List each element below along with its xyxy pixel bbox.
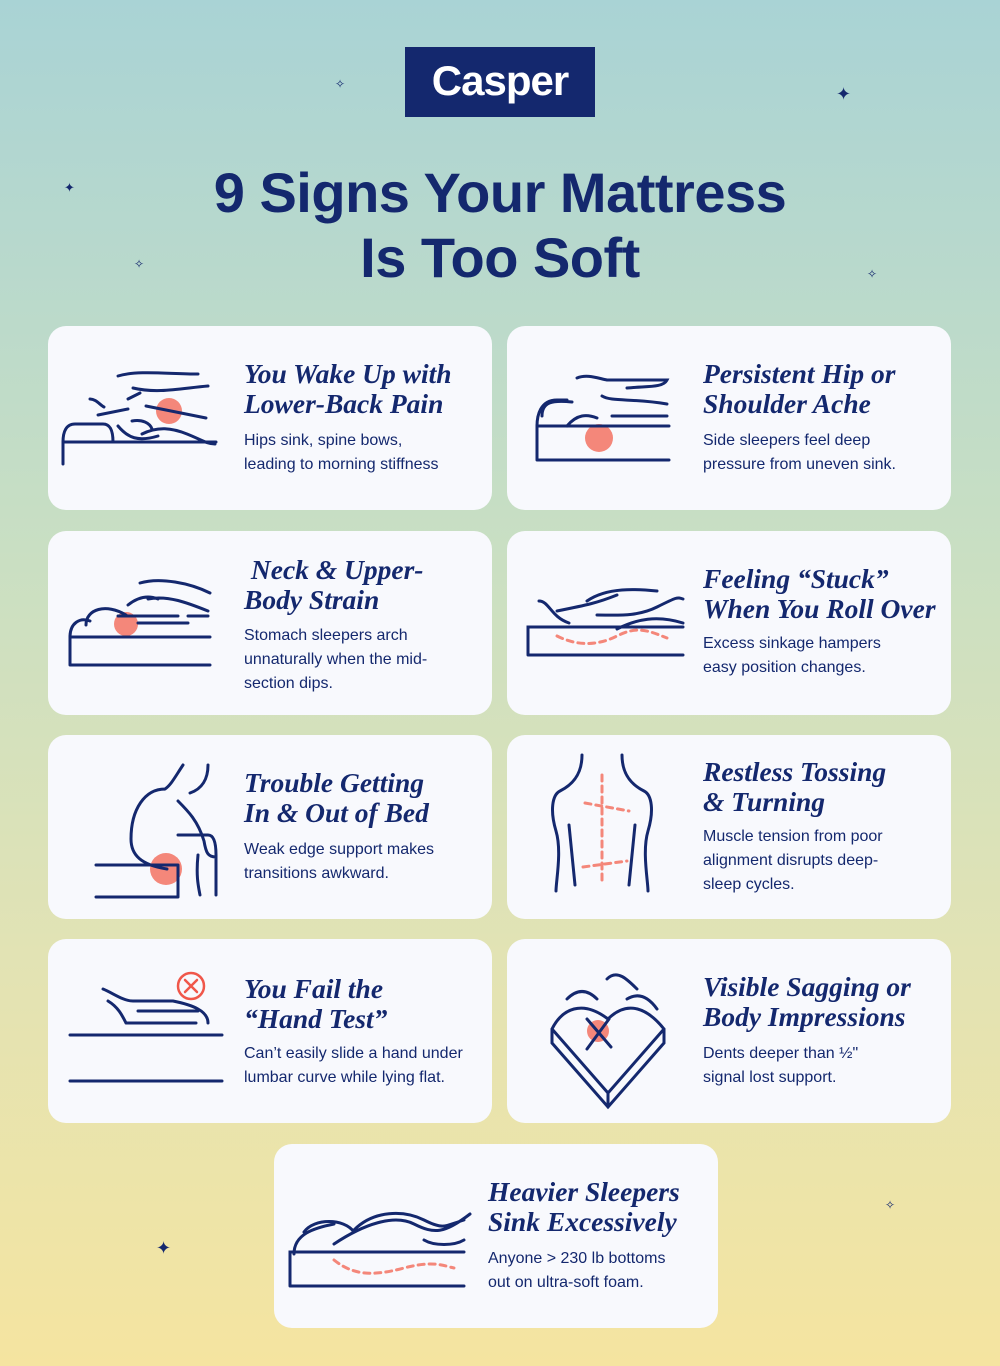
card 3: neck strain — [48, 531, 492, 715]
heading — [702, 971, 911, 1032]
body text: out on ultra-soft foam. — [488, 1274, 644, 1291]
logo: Casper — [432, 57, 568, 104]
icon: hand under back — [68, 972, 224, 1082]
body text — [244, 1045, 463, 1086]
icon: sagging mattress — [550, 973, 666, 1110]
heading: In & Out of Bed — [244, 797, 429, 828]
heading: Trouble Getting — [244, 767, 424, 798]
heading: Feeling “Stuck” — [703, 563, 889, 594]
body text — [703, 635, 881, 676]
body text: Hips sink, spine bows, — [244, 432, 402, 449]
body text: signal lost support. — [703, 1069, 836, 1086]
heading: Sink Excessively — [488, 1206, 677, 1237]
title — [214, 161, 786, 289]
title: Is Too Soft — [360, 226, 640, 289]
card 5: trouble getting out of bed — [48, 735, 492, 919]
body text — [244, 627, 427, 692]
body text: Dents deeper than ½" — [703, 1045, 858, 1062]
heading: Heavier Sleepers — [488, 1176, 680, 1207]
body text: Can’t easily slide a hand under — [244, 1045, 463, 1062]
card 2: hip shoulder ache — [507, 326, 951, 510]
body text: Muscle tension from poor — [703, 828, 883, 845]
heading: Shoulder Ache — [703, 388, 871, 419]
heading — [488, 1176, 680, 1237]
card 7: hand test — [48, 939, 492, 1123]
heading — [703, 358, 896, 419]
heading: Restless Tossing — [703, 756, 886, 787]
heading — [703, 756, 886, 817]
body text: Stomach sleepers arch — [244, 627, 408, 644]
heading: “Hand Test” — [244, 1003, 387, 1034]
heading — [244, 358, 452, 419]
body text: Excess sinkage hampers — [703, 635, 881, 652]
decorative stars — [64, 77, 940, 1258]
heading: Body Strain — [244, 584, 379, 615]
body text: Anyone > 230 lb bottoms — [488, 1250, 665, 1267]
body text — [703, 828, 883, 893]
heading — [244, 767, 430, 828]
icon: back with spine — [551, 754, 653, 892]
heading: Body Impressions — [703, 1001, 905, 1032]
body text: lumbar curve while lying flat. — [244, 1069, 445, 1086]
heading — [703, 563, 936, 624]
heading: & Turning — [703, 786, 825, 817]
title: 9 Signs Your Mattress — [214, 161, 786, 224]
body text: transitions awkward. — [244, 865, 389, 882]
body text — [244, 432, 438, 473]
text: ✧ — [335, 77, 345, 91]
heading: You Fail the — [244, 973, 383, 1004]
text: ✧ — [885, 1198, 895, 1212]
text: ✦ — [156, 1238, 171, 1258]
icon: heavy sleeper sinking — [288, 1212, 472, 1288]
body text: Side sleepers feel deep — [703, 432, 870, 449]
body text — [703, 1045, 858, 1086]
heading — [244, 554, 423, 615]
icon: stomach sleeper — [68, 579, 212, 666]
card 1: lower back pain — [48, 326, 492, 510]
heading: When You Roll Over — [703, 593, 936, 624]
body text — [244, 841, 434, 882]
card 9: heavier sleepers — [274, 1144, 718, 1328]
body text: sleep cycles. — [703, 876, 795, 893]
heading: Neck & Upper- — [251, 554, 423, 585]
heading: You Wake Up with — [244, 358, 452, 389]
body text — [488, 1250, 665, 1291]
heading — [244, 973, 387, 1034]
text: ✧ — [134, 257, 144, 271]
icon: side sleeper — [536, 374, 670, 462]
icon: rolling sleeper — [526, 588, 684, 656]
body text: section dips. — [244, 675, 333, 692]
heading: Lower-Back Pain — [244, 388, 443, 419]
body text: pressure from uneven sink. — [703, 456, 896, 473]
text: ✦ — [64, 180, 75, 195]
card 6: tossing — [507, 735, 951, 919]
body text: unnaturally when the mid- — [244, 651, 427, 668]
body text: alignment disrupts deep- — [703, 852, 878, 869]
logo — [405, 47, 595, 117]
text: ✦ — [836, 84, 851, 104]
body text: easy position changes. — [703, 659, 866, 676]
heading: Visible Sagging or — [703, 971, 911, 1002]
icon: sitting person — [94, 763, 218, 898]
icon: back pain sleeper — [62, 371, 218, 466]
heading: Persistent Hip or — [703, 358, 896, 389]
card 4: stuck — [507, 531, 951, 715]
body text — [703, 432, 896, 473]
text: ✧ — [867, 267, 877, 281]
body text: Weak edge support makes — [244, 841, 434, 858]
card 8: sagging — [507, 939, 951, 1123]
body text: leading to morning stiffness — [244, 456, 438, 473]
